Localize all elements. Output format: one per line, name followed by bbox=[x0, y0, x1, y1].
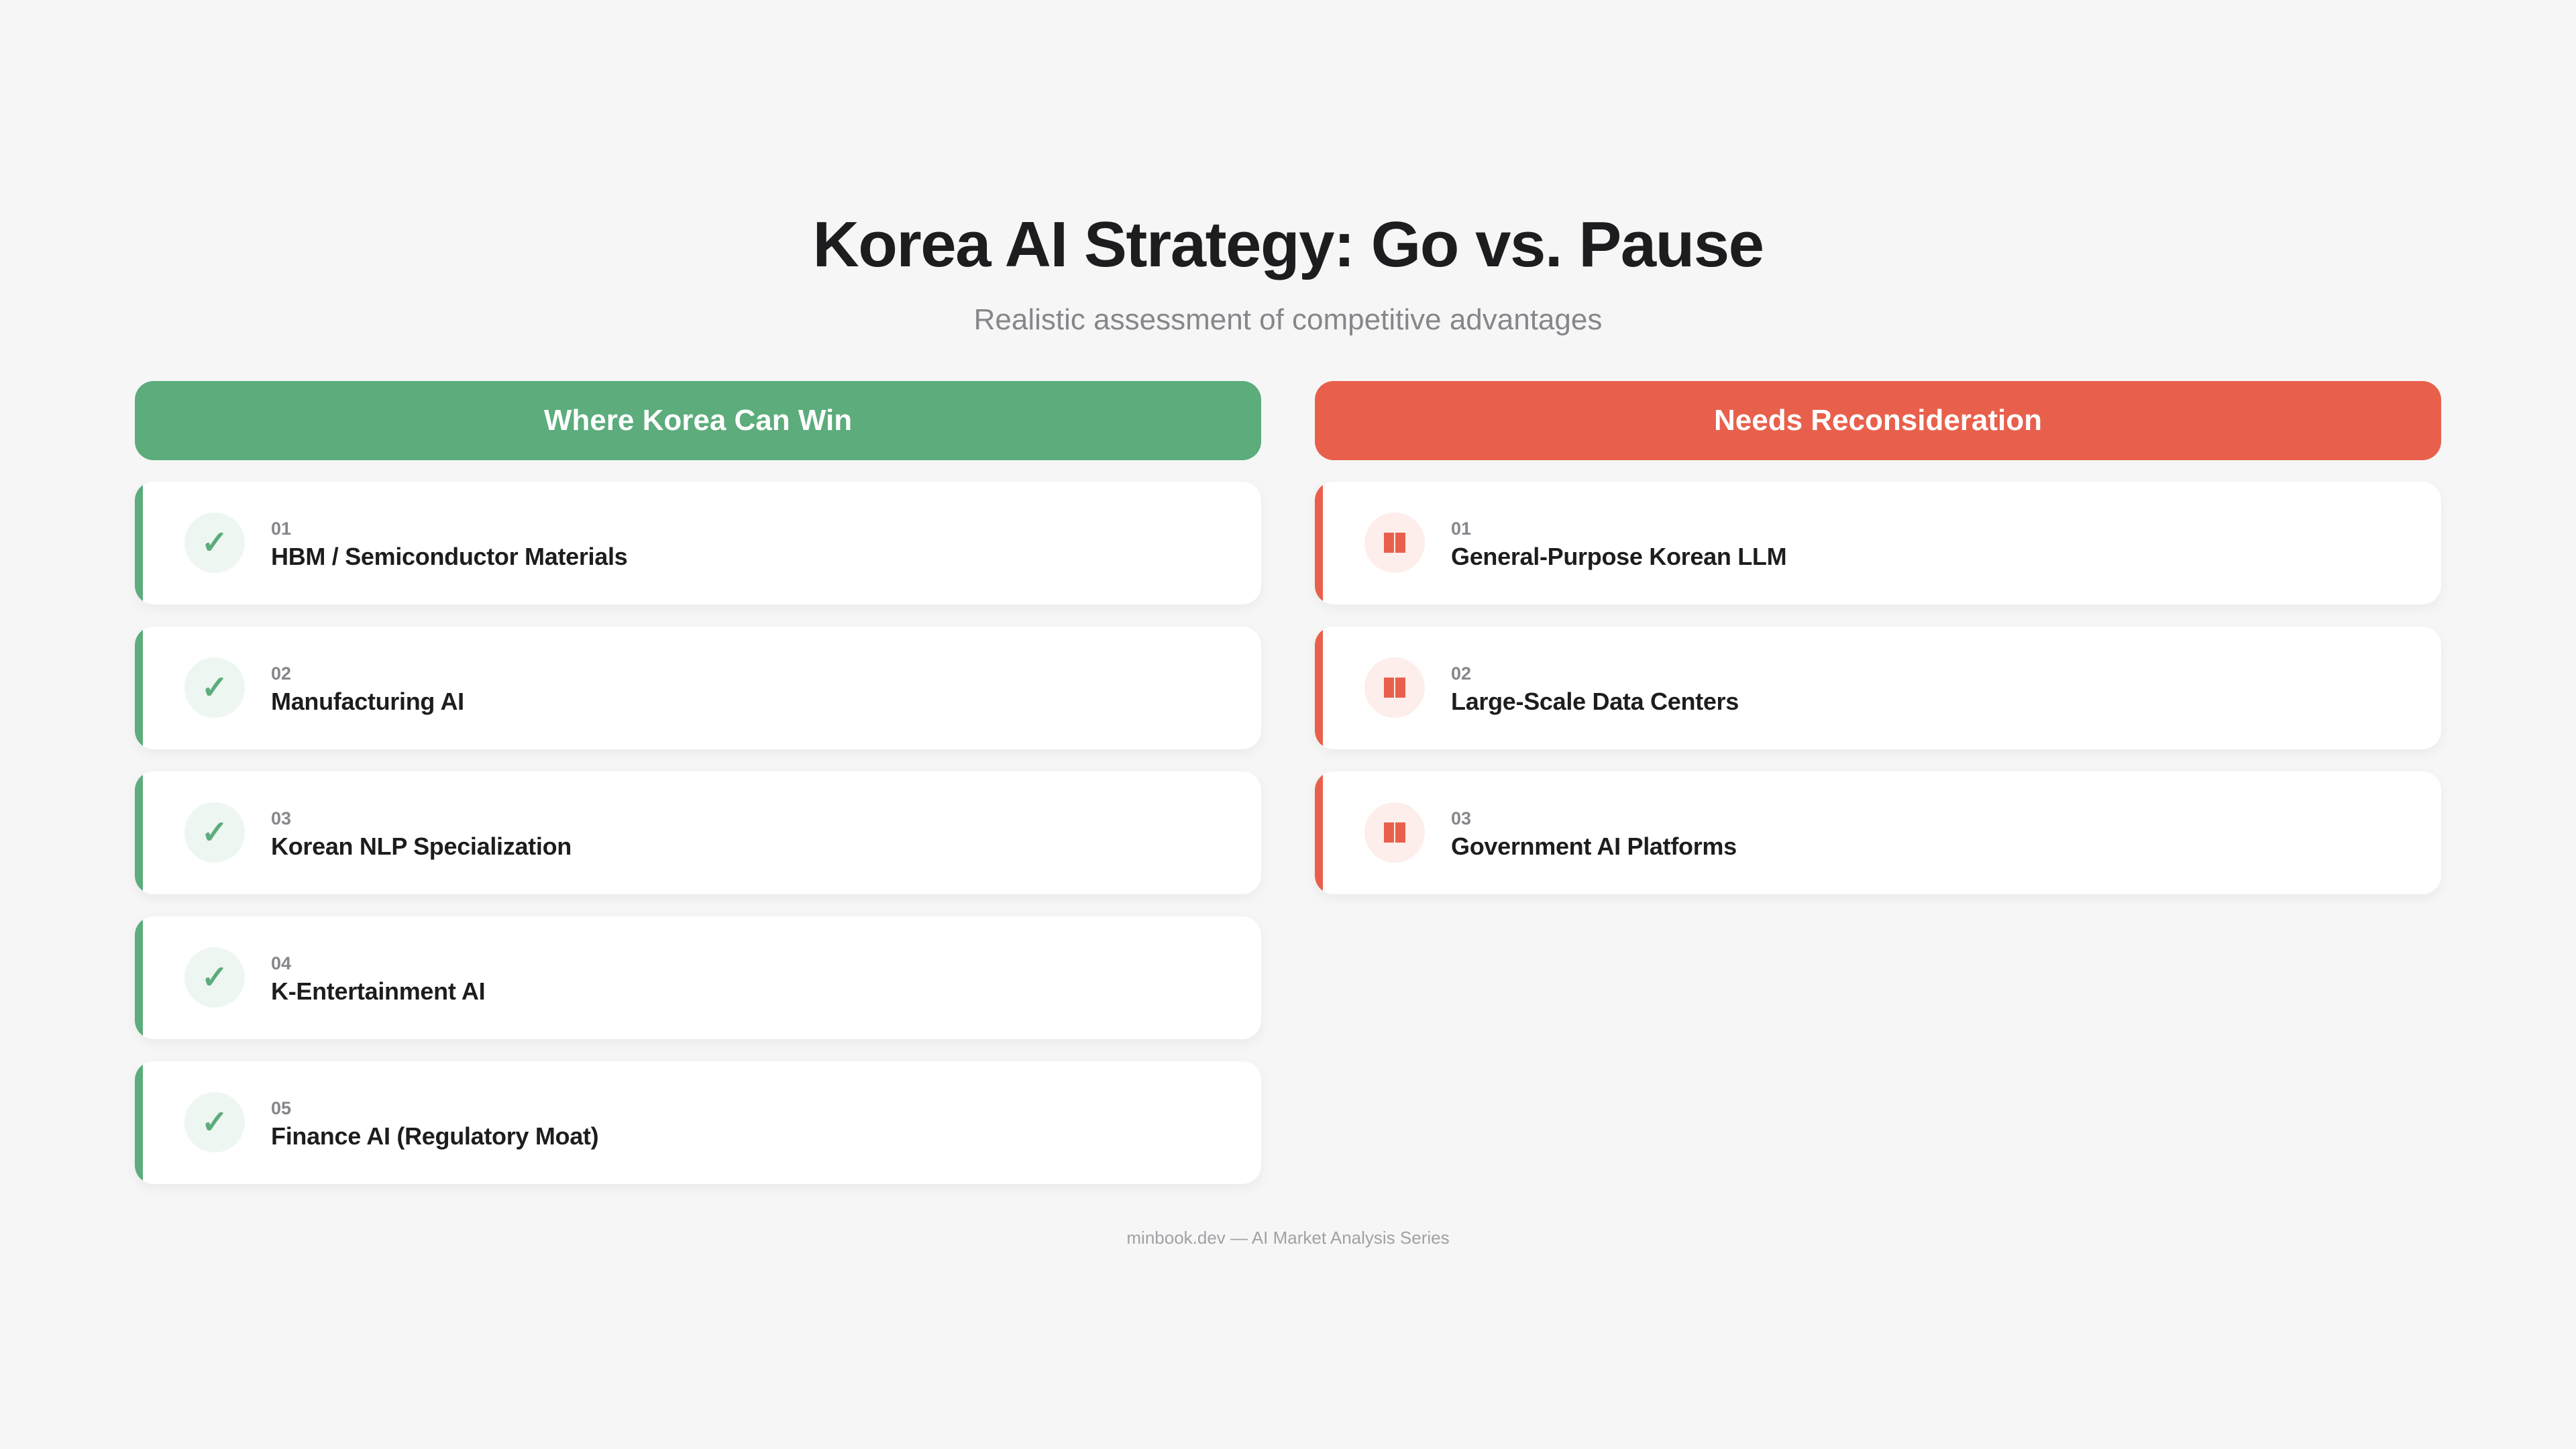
card 01: HBM / Semiconductor Materials bbox=[271, 543, 627, 570]
heading: needs reconsideration: Needs Reconsideration bbox=[1714, 404, 2042, 437]
card 04: 04 bbox=[271, 953, 291, 973]
card 05: Finance AI (Regulatory Moat) bbox=[271, 1122, 598, 1150]
card 01: 01 bbox=[1451, 519, 1471, 539]
card 01: ✓ bbox=[201, 525, 228, 561]
card 04: K-Entertainment AI bbox=[271, 977, 485, 1005]
card 02 bbox=[1315, 627, 2441, 749]
card 03: 03 bbox=[1451, 808, 1471, 828]
card 02: 02 bbox=[271, 663, 291, 684]
heading: needs reconsideration bbox=[1315, 381, 2441, 460]
card 04: ✓ bbox=[201, 960, 228, 996]
panel: where korea can win bbox=[135, 381, 1261, 1185]
card 05 bbox=[135, 1061, 1261, 1184]
card 02: Manufacturing AI bbox=[271, 688, 464, 715]
card 03: 03 bbox=[271, 808, 291, 828]
heading: where korea can win: Where Korea Can Win bbox=[544, 404, 852, 437]
panel: needs reconsideration bbox=[1315, 381, 2441, 895]
card 05: 05 bbox=[271, 1098, 291, 1118]
card 01: 01 bbox=[271, 519, 291, 539]
card 04 bbox=[135, 916, 1261, 1039]
card 05: ✓ bbox=[201, 1105, 228, 1140]
card 02: Large-Scale Data Centers bbox=[1451, 688, 1739, 715]
card 02 bbox=[135, 627, 1261, 749]
card 03: Korean NLP Specialization bbox=[271, 833, 572, 860]
footer: minbook.dev — AI Market Analysis Series bbox=[1126, 1228, 1450, 1248]
card 03: ✓ bbox=[201, 815, 228, 851]
card 03: Government AI Platforms bbox=[1451, 833, 1737, 860]
card 01: General-Purpose Korean LLM bbox=[1451, 543, 1786, 570]
title: Korea AI Strategy: Go vs. Pause bbox=[812, 209, 1764, 280]
card 01 bbox=[135, 482, 1261, 604]
card 01 bbox=[1315, 482, 2441, 604]
card 02: 02 bbox=[1451, 663, 1471, 684]
card 03 bbox=[135, 771, 1261, 894]
card 02: ✓ bbox=[201, 670, 228, 706]
subtitle: Realistic assessment of competitive advantages bbox=[974, 303, 1602, 336]
card 03 bbox=[1315, 771, 2441, 894]
heading: where korea can win bbox=[135, 381, 1261, 460]
